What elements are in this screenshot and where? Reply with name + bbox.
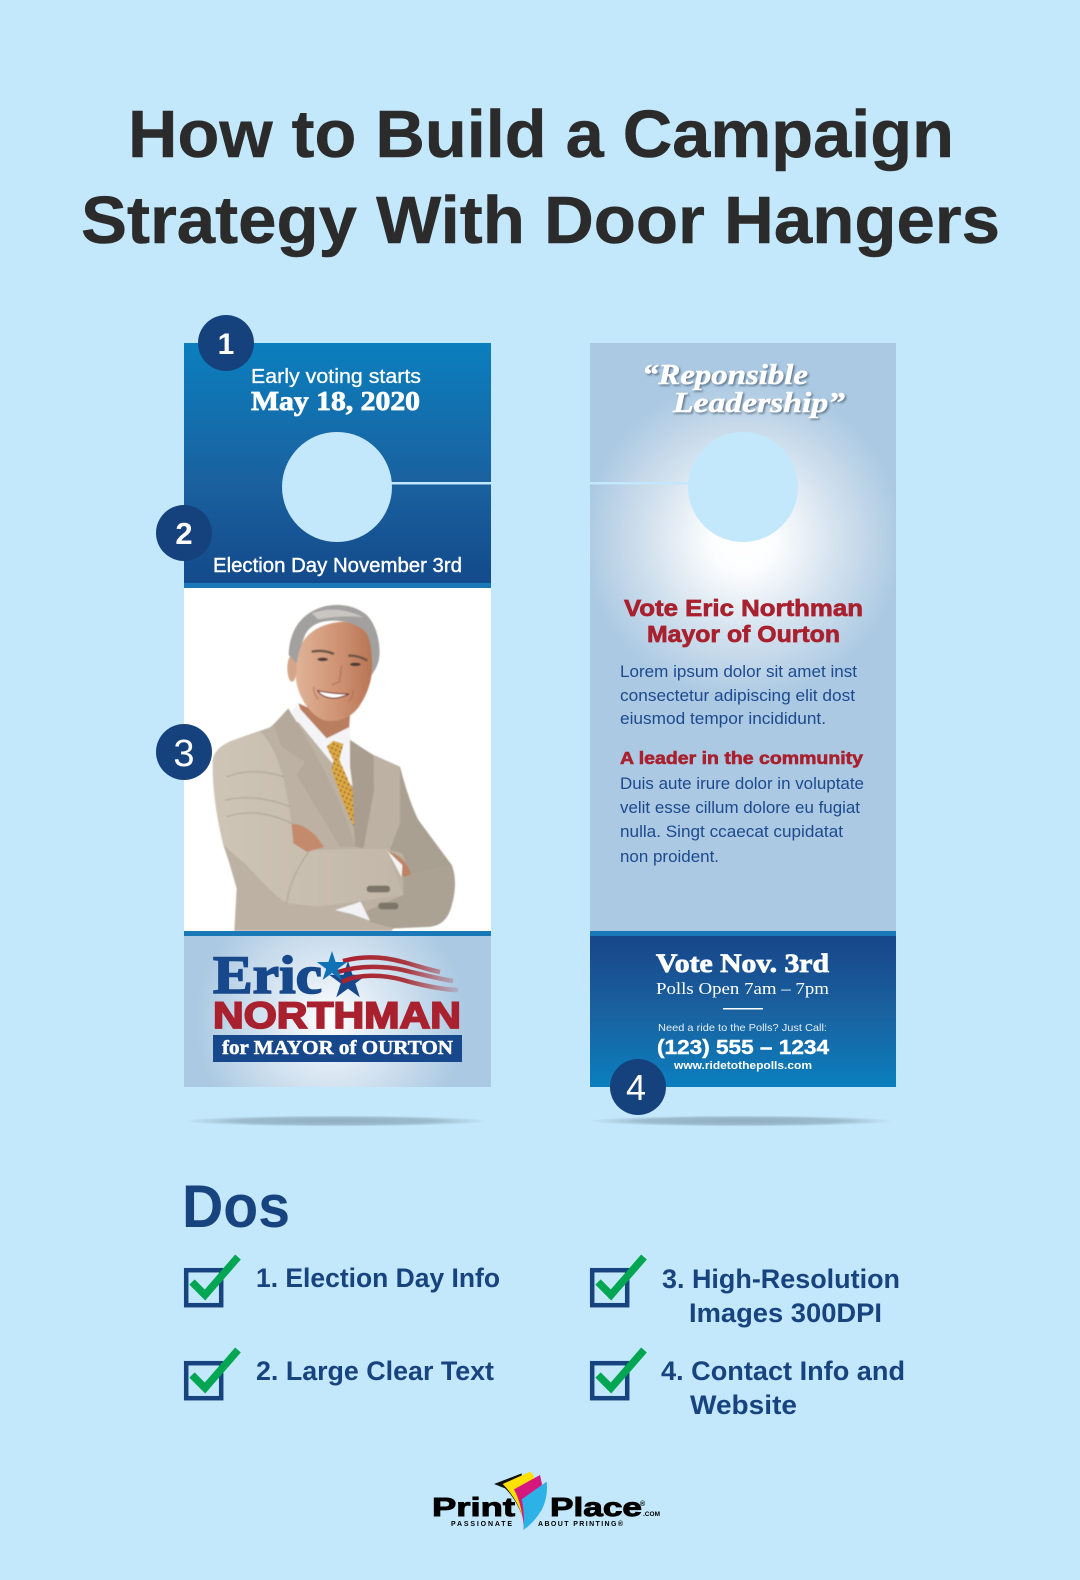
paragraph two: Duis aute irure dolor in voluptate [620,775,864,793]
door hole with slit [590,432,798,542]
back lower section [590,931,896,1087]
title: Strategy With Door Hangers [81,183,1000,258]
item 3 [592,1257,900,1328]
back lower section: Polls Open 7am – 7pm [656,979,829,998]
campaign logo: NORTHMAN [213,995,461,1036]
shadow under front hanger [184,1116,488,1126]
early voting text: Early voting starts [251,366,421,388]
paragraph two: velit esse cillum dolore eu fugiat [620,799,860,817]
early voting text [251,366,421,416]
campaign logo: Eric [213,945,322,1005]
shirt collar [291,705,353,787]
vote heading: Vote Eric Northman [624,595,863,621]
badge 1: 1 [218,328,234,361]
item 3: 3. High-Resolution [662,1264,900,1294]
forearm and hands [292,824,324,852]
vote heading: Mayor of Ourton [647,621,840,647]
brows and eyes [312,651,367,661]
subheading: A leader in the community [620,748,863,768]
badge 3 [156,724,212,780]
jacket [213,708,455,931]
hair [289,605,380,675]
icon: checkbox [592,1350,644,1398]
election day text: Election Day November 3rd [213,555,462,577]
back upper section [590,343,896,931]
vote heading [624,595,863,647]
badge 3: 3 [173,733,195,775]
tie [327,741,354,827]
item 2: 2. Large Clear Text [256,1356,494,1386]
heading: Dos: Dos [182,1173,290,1240]
smile [318,691,349,698]
campaign logo: for MAYOR of OURTON [222,1037,454,1059]
paragraph two [620,775,864,866]
title: How to Build a Campaign [128,97,954,172]
paragraph one: consectetur adipiscing elit dost [620,687,855,705]
icon: folder pages [494,1472,547,1530]
icon: checkbox [592,1257,644,1305]
slogan [642,359,846,419]
panel: door hanger front [184,343,491,1087]
badge 1 [198,315,254,371]
slogan: Leadership” [672,387,846,419]
logo section [184,931,491,1087]
logo: PrintPlace: PASSIONATE [451,1521,512,1528]
logo: PrintPlace: ABOUT PRINTING® [538,1520,624,1528]
back lower section: www.ridetothepolls.com [673,1060,812,1072]
item 4 [592,1350,905,1420]
face [296,622,373,721]
logo: PrintPlace [432,1472,660,1530]
panel: door hanger back [590,343,896,1087]
neck [298,703,350,740]
door hole with slit [282,432,491,542]
front top section [184,343,491,588]
item 2 [186,1350,494,1398]
logo: PrintPlace: Print [432,1492,515,1522]
badge 4 [610,1059,666,1115]
item 1 [186,1257,500,1305]
candidate photo [184,588,491,931]
paragraph two: non proident. [620,848,719,866]
badge 4: 4 [626,1067,646,1108]
title [81,97,1000,258]
back lower section: (123) 555 – 1234 [657,1037,830,1059]
logo: PrintPlace: ® [640,1500,646,1508]
campaign logo [213,945,462,1062]
paragraph two: nulla. Singt ccaecat cupidatat [620,823,843,841]
shadow under back hanger [589,1116,893,1126]
icon: checkbox [186,1257,238,1305]
paragraph one: eiusmod tempor incididunt. [620,710,826,728]
logo: PrintPlace: Place [550,1492,642,1522]
paragraph one: Lorem ipsum dolor sit amet inst [620,663,857,681]
item 4: Website [690,1390,797,1420]
early voting text: May 18, 2020 [251,386,420,416]
item 3: Images 300DPI [689,1298,882,1328]
paragraph one [620,663,857,728]
icon: checkbox [186,1350,238,1398]
item 4: 4. Contact Info and [661,1356,905,1386]
badge 2 [156,505,212,561]
logo: PrintPlace: .COM [643,1511,660,1518]
slogan: “Reponsible [642,359,808,391]
badge 2: 2 [175,516,193,551]
back lower section: Vote Nov. 3rd [656,949,830,978]
item 1: 1. Election Day Info [256,1263,500,1293]
back lower section: Need a ride to the Polls? Just Call: [658,1022,827,1034]
